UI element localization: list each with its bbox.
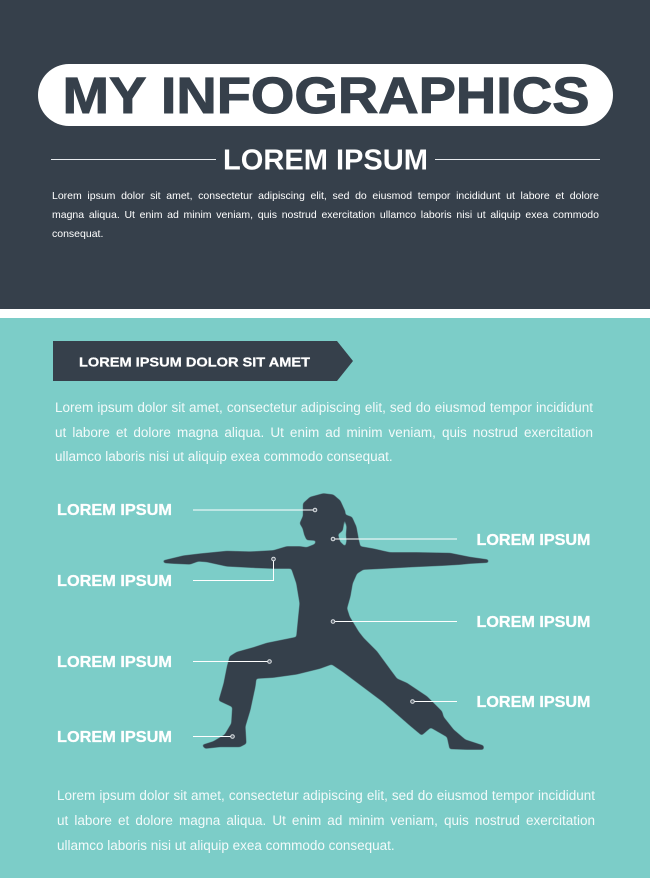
intro paragraph: ut labore et dolore magna aliqua. Ut enim ad minim veniam, quis nostrud exercitation (55, 425, 593, 440)
icon: yoga silhouette (163, 493, 488, 750)
intro paragraph: ullamco laboris nisi ut aliquip exea commodo consequat. (55, 449, 393, 464)
right labels: LOREM IPSUM (476, 532, 590, 549)
left labels: LOREM IPSUM (57, 729, 172, 746)
left labels: LOREM IPSUM (57, 654, 172, 671)
left labels: LOREM IPSUM (57, 502, 172, 519)
left labels: LOREM IPSUM (57, 573, 172, 590)
right labels (476, 532, 590, 711)
callout lines and markers (193, 508, 457, 738)
closing paragraph (57, 788, 595, 853)
title pill: MY INFOGRAPHICS (62, 67, 590, 124)
header paragraph: magna aliqua. Ut enim ad minim veniam, quis nostrud exercitation ullamco laboris nisi ut aliquip exea commodo (52, 209, 599, 221)
teal panel (0, 318, 650, 878)
left labels (57, 502, 172, 746)
subtitle with rules: LOREM IPSUM (223, 144, 428, 176)
intro paragraph (55, 400, 593, 464)
header paragraph: consequat. (52, 228, 103, 240)
header paragraph (52, 190, 599, 240)
closing paragraph: ullamco laboris nisi ut aliquip exea commodo consequat. (57, 838, 395, 853)
right labels: LOREM IPSUM (476, 614, 590, 631)
banner heading (53, 341, 353, 381)
closing paragraph: ut labore et dolore magna aliqua. Ut enim ad minim veniam, quis nostrud exercitation (57, 813, 595, 828)
header paragraph: Lorem ipsum dolor sit amet, consectetur adipiscing elit, sed do eiusmod tempor incididunt ut labore et dolore (52, 190, 599, 202)
closing paragraph: Lorem ipsum dolor sit amet, consectetur adipiscing elit, sed do eiusmod tempor incididunt (57, 788, 595, 803)
header panel (0, 0, 650, 309)
intro paragraph: Lorem ipsum dolor sit amet, consectetur adipiscing elit, sed do eiusmod tempor incididunt (55, 400, 593, 415)
banner heading: LOREM IPSUM DOLOR SIT AMET (79, 354, 310, 370)
right labels: LOREM IPSUM (476, 694, 590, 711)
